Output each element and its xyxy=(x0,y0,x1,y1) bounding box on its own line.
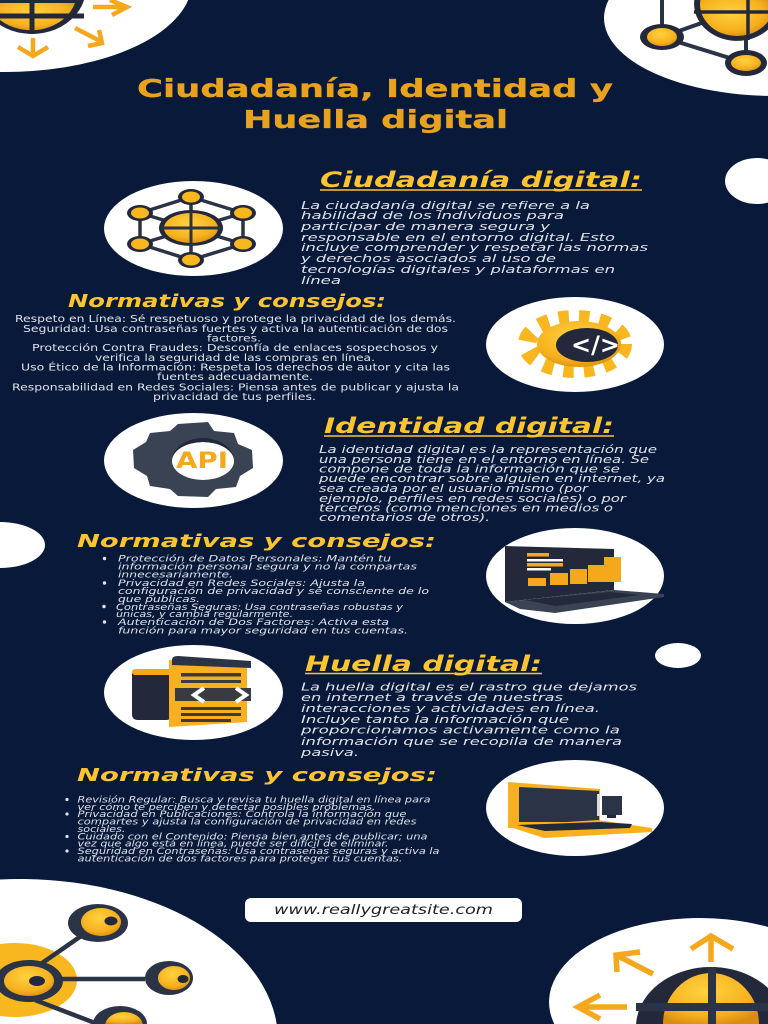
decorative white blob: right of first heading xyxy=(725,158,768,204)
text block: Normativas list 3: ver cómo te perciben y detectar posibles problemas. xyxy=(78,802,376,813)
text block: Ciudadanía digital definition: incluye comprender y respetar las normas xyxy=(301,242,649,254)
text block: Normativas list 2: Protección de Datos Personales: Mantén tu xyxy=(118,554,392,564)
text block: Ciudadanía digital definition: y derechos asociados al uso de xyxy=(299,253,556,265)
text block: Normativas list 2: función para mayor seguridad en tus cuentas. xyxy=(118,626,408,636)
text block: Huella digital definition: Incluye tanto la información que xyxy=(301,714,569,726)
text block: Normativas list 2: únicas, y cambia regularmente. xyxy=(116,610,293,620)
text block: Identidad digital definition: ejemplo, perfiles en redes sociales) o por xyxy=(319,493,627,505)
text block: Identidad digital definition: puede encontrar sobre alguien en internet, ya xyxy=(318,473,665,485)
text block: Normativas list 1: Respeto en Línea: Sé respetuoso y protege la privacidad de los demás. xyxy=(15,314,456,325)
text block: Ciudadanía digital definition: habilidad de los individuos para xyxy=(301,210,564,222)
heading: Normativas y consejos 2: Normativas y consejos: xyxy=(77,531,436,552)
heading: Huella digital: Huella digital: xyxy=(305,652,542,676)
website address pill xyxy=(245,898,522,922)
icon: laptop bar chart in white ellipse xyxy=(486,528,664,624)
text block: Huella digital definition: pasiva. xyxy=(299,747,359,759)
text block: Huella digital definition xyxy=(299,682,638,759)
text block: Normativas list 1 xyxy=(12,314,459,403)
icon: code gear in white ellipse: </> xyxy=(571,331,620,359)
text block: Normativas list 1: Seguridad: Usa contraseñas fuertes y activa la autenticación de dos xyxy=(23,324,448,335)
text block: Normativas list 2 xyxy=(102,554,429,636)
text block: Ciudadanía digital definition: línea xyxy=(301,275,341,287)
text block: Identidad digital definition: sea creada por el usuario mismo (por xyxy=(319,483,589,495)
text block: Ciudadanía digital definition xyxy=(299,200,649,287)
icon: network globe in white ellipse xyxy=(104,181,283,276)
text block: Identidad digital definition: La identidad digital es la representación que xyxy=(319,444,657,456)
text block: Identidad digital definition: comentarios de otros). xyxy=(319,512,490,524)
title xyxy=(137,74,613,134)
website address pill: www.reallygreatsite.com xyxy=(274,903,493,918)
text block: Normativas list 2: información personal segura y no la compartas xyxy=(118,562,418,572)
text block: Normativas list 1: privacidad de tus perfiles. xyxy=(153,392,316,403)
text block: Identidad digital definition: compone de toda la información que se xyxy=(319,464,620,476)
text block: Ciudadanía digital definition: tecnologías digitales y plataformas en xyxy=(301,264,615,276)
text block: Normativas list 3: Seguridad en Contraseñas: Usa contraseñas seguras y activa la xyxy=(78,847,440,857)
text block: Normativas list 1: Responsabilidad en Redes Sociales: Piensa antes de publicar y ajusta la xyxy=(12,382,459,394)
text block: Huella digital definition: información que se recopila de manera xyxy=(301,736,622,748)
text block: Normativas list 1: fuentes adecuadamente. xyxy=(157,372,313,383)
heading: Ciudadanía digital: Ciudadanía digital: xyxy=(320,168,642,192)
text block: Normativas list 3: vez que algo está en línea, puede ser difícil de eliminar. xyxy=(78,840,388,850)
text block: Ciudadanía digital definition: La ciudadanía digital se refiere a la xyxy=(301,200,590,212)
text block: Normativas list 1: Uso Ético de la Información: Respeta los derechos de autor y cita las xyxy=(21,362,450,374)
icon: API gear in white ellipse xyxy=(104,413,283,508)
text block: Normativas list 1: Protección Contra Fraudes: Desconfía de enlaces sospechosos y xyxy=(32,343,438,354)
text block: Normativas list 2: que publicas. xyxy=(118,595,200,605)
text block: Normativas list 2: configuración de privacidad y sé consciente de lo xyxy=(118,586,429,597)
text block: Normativas list 3: Cuidado con el Contenido: Piensa bien antes de publicar; una xyxy=(78,832,428,842)
icon: API gear in white ellipse: API xyxy=(176,449,228,474)
text block: Ciudadanía digital definition: participar de manera segura y xyxy=(299,221,551,233)
text block: Normativas list 1: verifica la seguridad de las compras en línea. xyxy=(95,353,375,364)
icon: yellow computer in white ellipse xyxy=(486,760,664,856)
text block: Normativas list 1: factores. xyxy=(207,334,261,344)
text block: Normativas list 3: sociales. xyxy=(78,825,126,835)
corner blob: top right with network globe xyxy=(604,0,768,96)
heading: Normativas y consejos 1: Normativas y consejos: xyxy=(68,291,386,312)
heading: Normativas y consejos 3: Normativas y consejos: xyxy=(77,765,437,786)
text block: Huella digital definition: La huella digital es el rastro que dejamos xyxy=(301,682,638,694)
decorative white dot xyxy=(655,643,701,668)
text block: Normativas list 3: Privacidad en Publicaciones: Controla la información que xyxy=(78,809,406,820)
text block: Normativas list 2: innecesariamente. xyxy=(118,570,233,580)
text block: Huella digital definition: interacciones y actividades en línea. xyxy=(301,703,600,715)
text block: Normativas list 3: autenticación de dos factores para proteger tus cuentas. xyxy=(78,854,402,864)
text block: Identidad digital definition: una persona tiene en el entorno en línea. Se xyxy=(319,454,649,466)
text block: Identidad digital definition: terceros (como menciones en medios o xyxy=(319,502,613,514)
text block: Normativas list 2: Contraseñas Seguras: Usa contraseñas robustas y xyxy=(116,603,404,613)
heading: Identidad digital: Identidad digital: xyxy=(324,414,614,438)
decorative white blob: left edge xyxy=(0,522,45,568)
text block: Normativas list 3 xyxy=(65,794,440,864)
icon: code gear in white ellipse xyxy=(486,297,664,392)
icon: browser window with code chevrons in white ellipse xyxy=(104,645,283,740)
corner blob: bottom right with globe and arrows xyxy=(549,918,768,1024)
text block: Normativas list 3: compartes y ajusta la configuración de privacidad en redes xyxy=(78,816,417,828)
title: Huella digital xyxy=(243,105,508,134)
text block: Ciudadanía digital definition: responsable en el entorno digital. Esto xyxy=(301,232,615,244)
text block: Huella digital definition: proporcionamos activamente como la xyxy=(299,724,620,736)
corner blob: bottom left with network nodes xyxy=(0,879,277,1024)
text block: Normativas list 2: Autenticación de Dos Factores: Activa esta xyxy=(117,617,389,628)
corner blob: top left with globe and arrows xyxy=(0,0,188,72)
text block: Normativas list 2: Privacidad en Redes Sociales: Ajusta la xyxy=(118,579,365,589)
text block: Normativas list 3: Revisión Regular: Busca y revisa tu huella digital en línea para xyxy=(78,794,430,806)
title: Ciudadanía, Identidad y xyxy=(137,74,613,103)
text block: Huella digital definition: en internet a través de nuestras xyxy=(301,692,564,704)
text block: Identidad digital definition xyxy=(318,444,665,524)
